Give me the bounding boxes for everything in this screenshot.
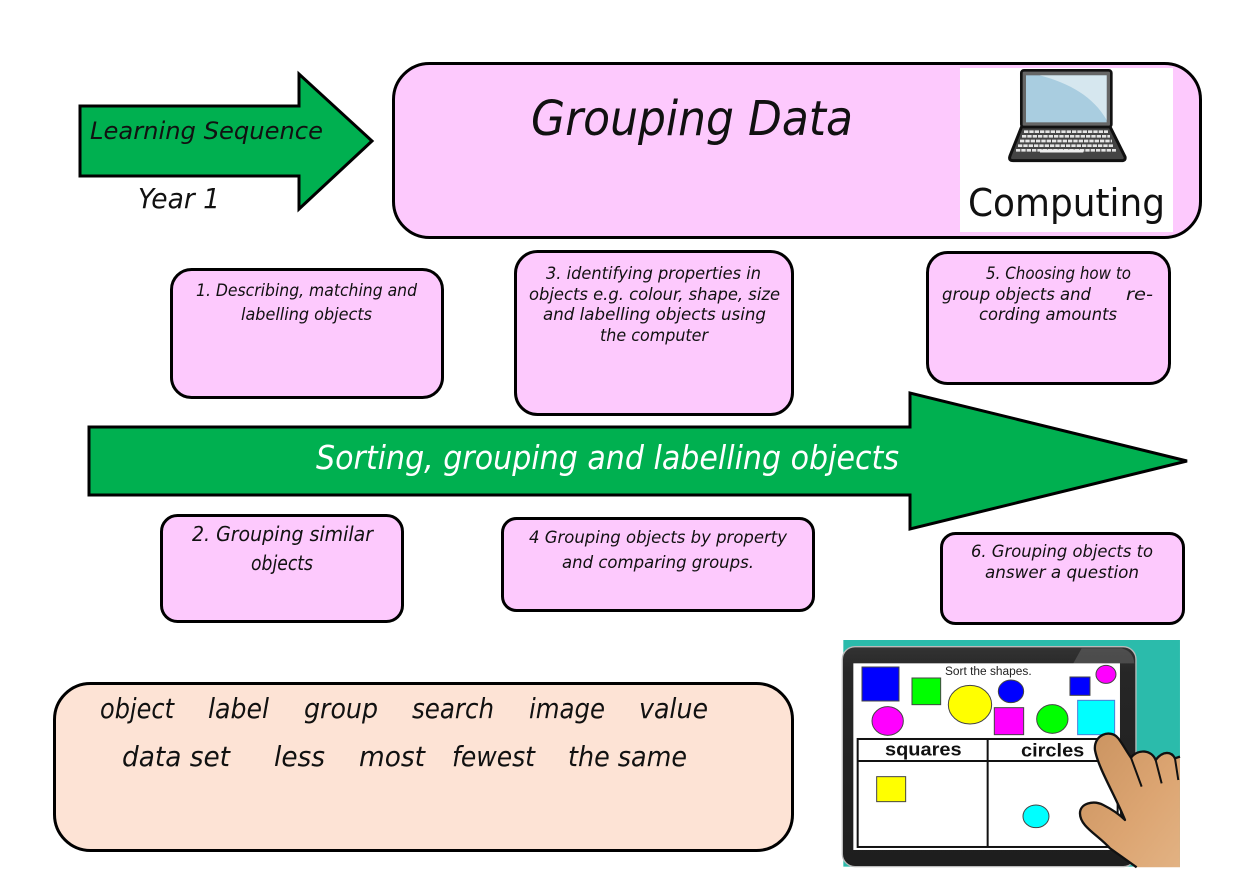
panel: step 4: [502, 518, 814, 610]
panel: step 3: and labelling objects using: [543, 305, 766, 325]
panel: vocabulary: the same: [568, 740, 687, 773]
image: tablet sorting activity: Sort the shapes.: [945, 664, 1032, 678]
panel: step 3: objects e.g. colour, shape, size: [529, 285, 780, 305]
arrow: sorting, grouping and labelling objects: [89, 393, 1187, 529]
panel: step 3: [516, 252, 792, 414]
panel: vocabulary: image: [529, 692, 605, 725]
panel: vocabulary: value: [639, 692, 708, 725]
panel: step 4: 4 Grouping objects by property: [529, 528, 788, 548]
panel: vocabulary: less: [274, 740, 325, 773]
panel: vocabulary: data set: [122, 740, 231, 773]
panel: step 5: 5. Choosing how to: [986, 264, 1131, 284]
text: Computing label: Computing: [968, 181, 1165, 225]
icon: laptop: [1010, 70, 1125, 161]
panel: step 5: [928, 252, 1170, 384]
panel: step 2: [162, 516, 402, 622]
panel: step 1: labelling objects: [241, 305, 372, 325]
panel: step 3: the computer: [600, 326, 709, 346]
text: year group: Year 1: [138, 182, 220, 215]
panel: step 1: 1. Describing, matching and: [196, 281, 417, 301]
panel: step 5: re-: [1126, 285, 1153, 305]
panel: vocabulary: label: [208, 692, 269, 725]
arrow: learning sequence: Learning Sequence: [90, 117, 323, 145]
panel: vocabulary: search: [412, 692, 494, 725]
image: tablet sorting activity: [842, 640, 1180, 867]
panel: step 6: [942, 534, 1184, 624]
panel: vocabulary: fewest: [452, 740, 536, 773]
panel: title: [394, 64, 1200, 238]
image: tablet sorting activity: squares: [885, 739, 962, 760]
heading: Grouping Data: Grouping Data: [531, 91, 853, 147]
panel: step 5: group objects and: [942, 285, 1091, 305]
arrow: learning sequence: [80, 74, 372, 209]
panel: vocabulary: group: [304, 692, 378, 725]
panel: vocabulary: most: [359, 740, 426, 773]
panel: step 3: 3. identifying properties in: [546, 264, 761, 284]
panel: step 1: [172, 270, 442, 398]
panel: step 4: and comparing groups.: [562, 553, 754, 573]
panel: step 6: 6. Grouping objects to: [971, 542, 1153, 562]
panel: vocabulary: [54, 684, 792, 850]
arrow: sorting, grouping and labelling objects: Sorting, grouping and labelling objects: [316, 438, 899, 477]
panel: vocabulary: object: [100, 692, 175, 725]
icon: computing laptop card: [960, 68, 1173, 232]
panel: step 2: 2. Grouping similar: [192, 522, 375, 546]
icon: pointing hand: [1080, 734, 1180, 867]
panel: step 5: cording amounts: [979, 305, 1117, 325]
image: tablet sorting activity: circles: [1021, 739, 1084, 760]
panel: step 2: objects: [251, 551, 313, 575]
panel: step 6: answer a question: [985, 563, 1139, 583]
